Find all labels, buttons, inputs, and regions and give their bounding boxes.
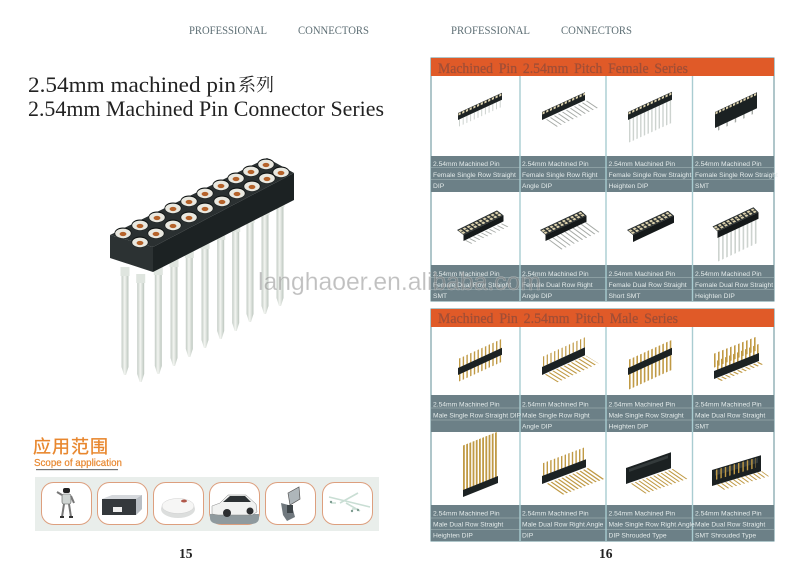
product: female single row straight DIP: DIP: [433, 183, 445, 190]
application heading: [33, 437, 122, 470]
product: female single row straight DIP: [433, 93, 516, 190]
product: female single row heighten DIP: Heighten DIP: [608, 183, 649, 190]
product: male dual row SMT shrouded: 2.54mm Machined Pin: [695, 510, 762, 518]
product: male dual row straight SMT: Male Dual Row Straight: [695, 412, 765, 420]
title: 2.54mm machined pin: [28, 72, 236, 97]
female series heading: Machined Pin 2.54mm Pitch Female Series: [438, 61, 688, 77]
product: female dual row right angle DIP: Angle DIP: [522, 293, 553, 300]
product: female single row straight DIP: 2.54mm Machined Pin: [433, 161, 500, 168]
product: female single row right angle DIP: [522, 92, 598, 190]
product: female dual row straight SMT: SMT: [433, 293, 447, 300]
icon: airplane: [322, 482, 372, 524]
product: male single row heighten DIP: [608, 348, 684, 430]
female series heading: [431, 58, 774, 77]
icon: medical machine: [266, 482, 316, 524]
product: female dual row short SMT: Short SMT: [608, 293, 640, 300]
male series heading: [431, 309, 774, 327]
product: female single row right angle DIP: 2.54mm Machined Pin: [522, 161, 589, 168]
product: female dual row heighten DIP: Heighten DIP: [695, 293, 735, 300]
application heading: 应用范围: [33, 437, 109, 457]
product: male single row right angle DIP: 2.54mm Machined Pin: [522, 402, 589, 408]
title: 系列: [238, 75, 274, 95]
page number 16: 16: [599, 546, 613, 561]
title: [28, 72, 384, 121]
product: male dual row right angle DIP: 2.54mm Machined Pin: [522, 510, 589, 518]
product: female dual row right angle DIP: [522, 211, 596, 300]
product: male single row heighten DIP: Male Single Row Straight: [608, 412, 684, 420]
product: male dual row right angle DIP: [522, 453, 604, 540]
product: female dual row straight SMT: Female Dual Row Straight: [433, 282, 511, 289]
watermark: langhaoer.en.alibaba.com: [258, 268, 541, 296]
product: male single row right angle shrouded DIP: DIP Shrouded Type: [608, 532, 667, 540]
product: male single row right angle shrouded DIP: [608, 452, 695, 540]
page header left: CONNECTORS: [298, 23, 369, 37]
product: male dual row SMT shrouded: SMT Shrouded Type: [695, 532, 756, 540]
page header left: [189, 23, 369, 37]
product: male single row straight DIP: 2.54mm Machined Pin: [433, 402, 500, 408]
product: female single row right angle DIP: Female Single Row Right: [522, 172, 598, 179]
icon: robot: [42, 482, 92, 524]
product: male dual row SMT shrouded: Male Dual Row Straight: [695, 522, 765, 528]
product: male single row right angle shrouded DIP: 2.54mm Machined Pin: [608, 510, 675, 518]
product: male single row straight DIP: [433, 348, 522, 420]
product: female dual row straight SMT: [433, 210, 511, 300]
product: male dual row right angle DIP: DIP: [522, 532, 534, 540]
product: female dual row heighten DIP: 2.54mm Machined Pin: [695, 271, 762, 278]
icon: robot vacuum: [154, 482, 204, 524]
product: female single row SMT: SMT: [695, 183, 709, 190]
product: female dual row straight SMT: 2.54mm Machined Pin: [433, 271, 500, 278]
product: male dual row heighten DIP: Heighten DIP: [433, 532, 473, 540]
product: female dual row heighten DIP: [695, 207, 773, 300]
product: female dual row right angle DIP: 2.54mm Machined Pin: [522, 271, 589, 278]
product: female dual row right angle DIP: Female Dual Row Right: [522, 282, 593, 289]
product: female dual row heighten DIP: Female Dual Row Straight: [695, 282, 773, 289]
page header left: PROFESSIONAL: [189, 23, 267, 37]
product: female single row heighten DIP: 2.54mm Machined Pin: [608, 161, 675, 168]
male series caption bands: [431, 327, 774, 541]
product: male single row heighten DIP: Heighten DIP: [608, 424, 649, 430]
page header right: [451, 23, 632, 37]
product: male dual row heighten DIP: Male Dual Row Straight: [433, 522, 503, 528]
icon: car: [210, 482, 260, 524]
page number 15: 15: [179, 546, 193, 561]
product: male dual row heighten DIP: 2.54mm Machined Pin: [433, 510, 500, 518]
product: male dual row heighten DIP: [433, 456, 503, 540]
product: male single row straight DIP: Male Single Row Straight DIP: [433, 412, 522, 420]
title: 2.54mm Machined Pin Connector Series: [28, 96, 384, 121]
panel: male series table: [431, 309, 774, 541]
application heading: Scope of application: [34, 457, 122, 469]
icon: power box: [98, 482, 148, 524]
page header right: CONNECTORS: [561, 23, 632, 37]
panel: application strip: [35, 477, 379, 531]
product: male single row right angle shrouded DIP: Male Single Row Right Angle: [608, 522, 695, 528]
female series caption bands: [431, 76, 774, 301]
product: female dual row short SMT: Female Dual Row Straight: [608, 282, 687, 289]
product: male single row right angle DIP: Male Single Row Right: [522, 412, 590, 420]
product: female dual row short SMT: [608, 211, 687, 300]
product: male dual row right angle DIP: Male Dual Row Right Angle: [522, 522, 604, 528]
product: female single row SMT: 2.54mm Machined Pin: [695, 161, 762, 168]
product: female single row SMT: [695, 91, 778, 190]
product: female dual row short SMT: 2.54mm Machined Pin: [608, 271, 675, 278]
product: female single row heighten DIP: [608, 92, 692, 190]
product: male single row right angle DIP: Angle DIP: [522, 424, 553, 430]
panel: female series table: [431, 58, 778, 301]
product: male single row right angle DIP: [522, 342, 592, 430]
male series heading: Machined Pin 2.54mm Pitch Male Series: [438, 311, 678, 327]
product: male dual row straight SMT: SMT: [695, 424, 709, 430]
page header right: PROFESSIONAL: [451, 23, 530, 37]
product: female single row straight DIP: Female Single Row Straight: [433, 172, 516, 179]
product: male dual row straight SMT: [695, 343, 765, 430]
main product image: dual row machined pin socket: [110, 158, 294, 382]
product: female single row SMT: Female Single Row Straight: [695, 172, 778, 179]
product: male dual row SMT shrouded: [695, 455, 766, 540]
product: male single row heighten DIP: 2.54mm Machined Pin: [608, 402, 675, 408]
product: female single row right angle DIP: Angle DIP: [522, 183, 553, 190]
product: male dual row straight SMT: 2.54mm Machined Pin: [695, 402, 762, 408]
product: female single row heighten DIP: Female Single Row Straight: [608, 172, 692, 179]
